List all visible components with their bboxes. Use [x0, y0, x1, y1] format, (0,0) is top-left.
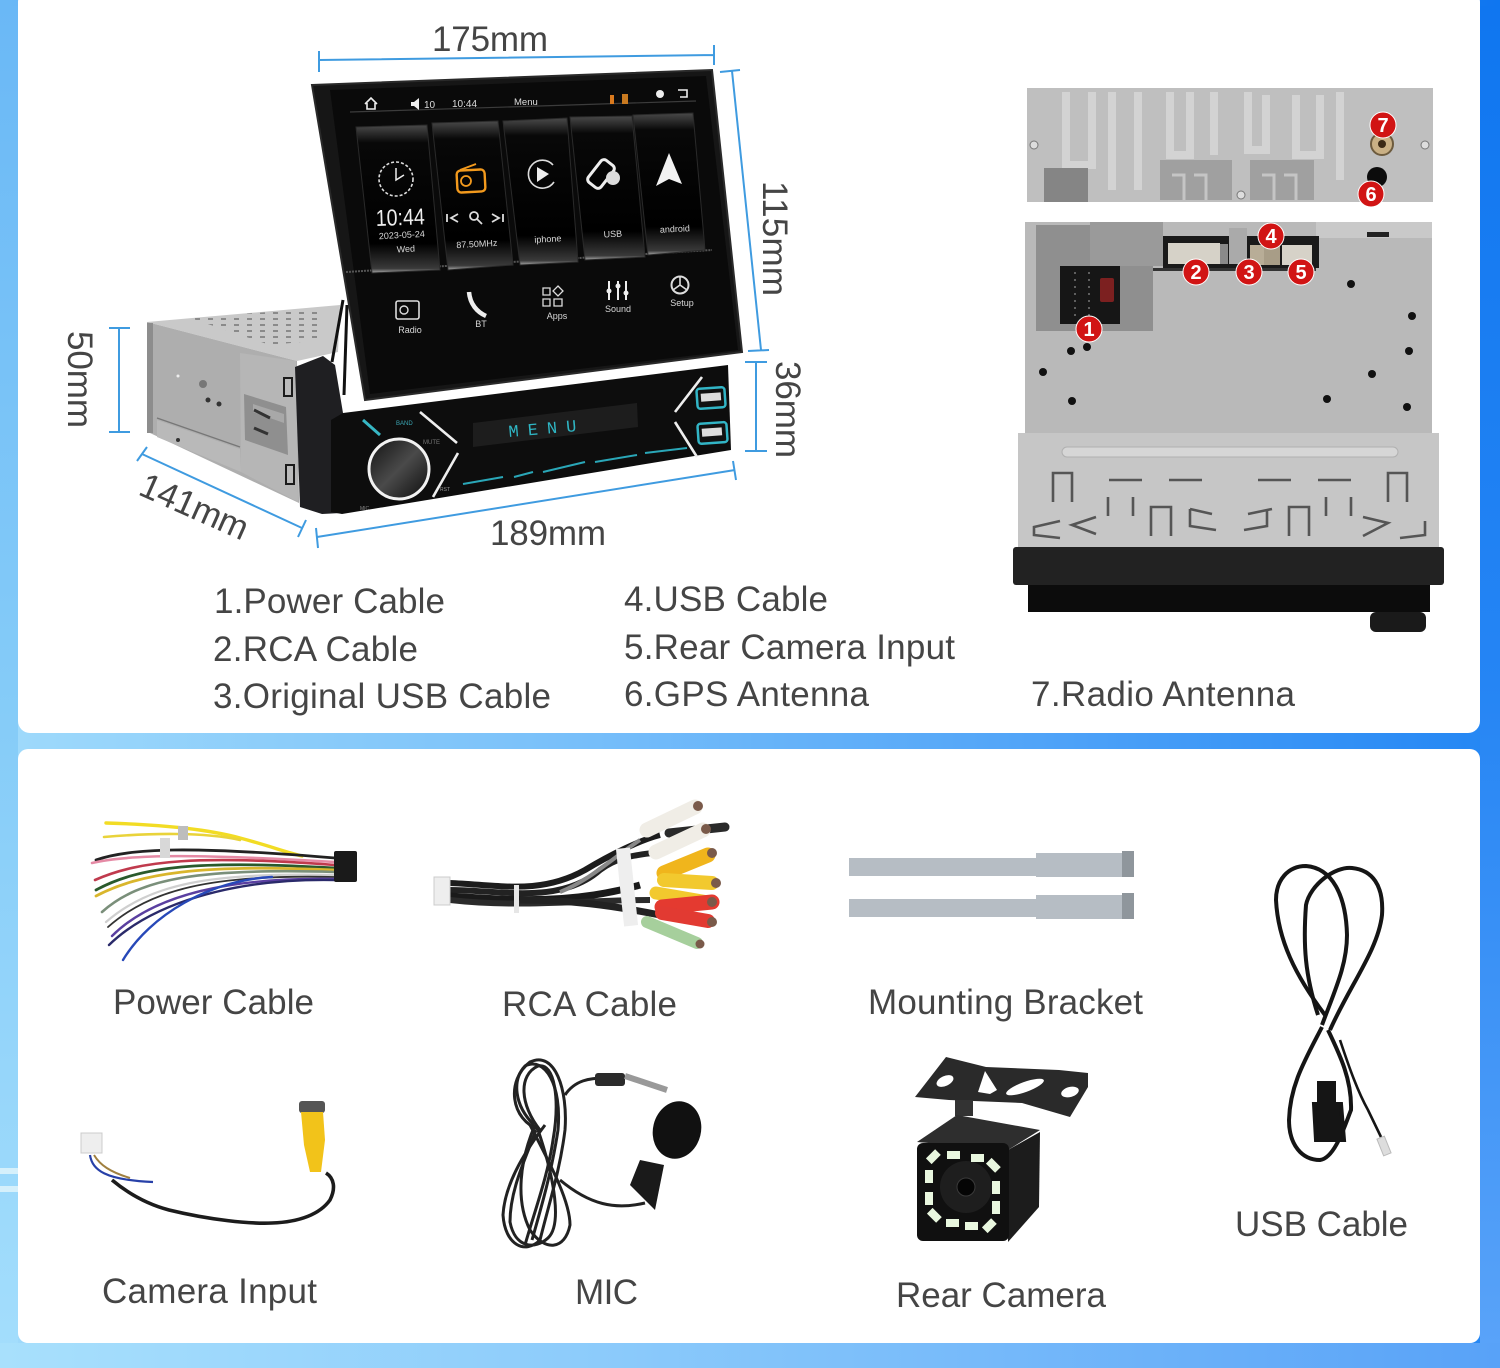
- faceplate of the radio: [295, 300, 731, 514]
- accessory captions: Rear Camera: [896, 1276, 1107, 1315]
- rear view: bottom bracket: [1018, 433, 1439, 547]
- bottom menu icons: Apps: [547, 311, 568, 321]
- numbered port markers: 4: [1265, 226, 1277, 248]
- port legend: 1.Power Cable: [214, 582, 445, 621]
- numbered port markers: 2: [1190, 262, 1202, 284]
- accessory captions: RCA Cable: [502, 985, 677, 1024]
- bottom menu icons: BT: [475, 319, 487, 329]
- mounting bracket illustration: [849, 851, 1134, 919]
- USB cable illustration: [1276, 866, 1391, 1160]
- dimension: 50mm: 50mm: [60, 331, 99, 428]
- clock card: 10:44: [375, 203, 425, 231]
- port legend: [213, 580, 1296, 716]
- port legend: 4.USB Cable: [624, 580, 828, 619]
- clock card: [375, 162, 425, 254]
- radio card: [447, 164, 503, 250]
- numbered port markers: 3: [1243, 262, 1255, 284]
- chassis of the radio: [147, 305, 340, 503]
- bottom menu icons: Setup: [670, 298, 694, 308]
- dimension: 189mm: [316, 461, 736, 553]
- clock card: Wed: [396, 244, 415, 254]
- faceplate of the radio: MUTE: [423, 440, 440, 446]
- port legend: 3.Original USB Cable: [213, 677, 551, 716]
- port legend: 6.GPS Antenna: [624, 675, 870, 714]
- faceplate of the radio: RST: [440, 487, 450, 493]
- panel: included accessories: [18, 749, 1480, 1343]
- USB card: [586, 158, 622, 239]
- dimension: 141mm: [134, 447, 306, 548]
- dimension: 141mm: 141mm: [134, 466, 255, 548]
- dimension: 189mm: 189mm: [490, 514, 606, 553]
- port legend: 5.Rear Camera Input: [624, 628, 955, 667]
- USB connectors: [1250, 245, 1268, 265]
- rear view: chassis: [1025, 222, 1432, 434]
- numbered port markers: [1076, 112, 1396, 342]
- accessory captions: [102, 983, 1408, 1315]
- dimension: 115mm: [720, 70, 794, 351]
- accessory captions: Power Cable: [113, 983, 314, 1022]
- dimension: 175mm: 175mm: [432, 20, 548, 59]
- USB card: USB: [603, 229, 622, 239]
- panel: product dimensions and ports: [18, 0, 1480, 733]
- faceplate of the radio: BAND: [396, 421, 413, 427]
- top status bar: 10:44: [452, 99, 477, 110]
- radio antenna socket: [1371, 133, 1393, 155]
- accessory captions: Mounting Bracket: [868, 983, 1143, 1022]
- dimension: 175mm: [319, 20, 714, 72]
- accessory captions: Camera Input: [102, 1272, 317, 1311]
- rear view: front bezel and knob: [1013, 547, 1444, 632]
- android card: android: [660, 223, 690, 235]
- RCA connector: [1168, 243, 1220, 264]
- rear camera illustration: [915, 1057, 1088, 1242]
- iphone card: [528, 160, 562, 245]
- bottom menu icons: Radio: [398, 325, 422, 335]
- dimension: 36mm: 36mm: [768, 361, 807, 458]
- bottom menu icons: Sound: [605, 304, 631, 314]
- GPS antenna socket: [1367, 167, 1387, 187]
- dimension: 36mm: [745, 361, 807, 458]
- accessory captions: MIC: [575, 1273, 638, 1312]
- USB ports: [696, 387, 728, 444]
- top status bar: [365, 90, 687, 111]
- numbered port markers: 6: [1365, 184, 1377, 206]
- numbered port markers: 1: [1083, 319, 1095, 341]
- preset buttons: [463, 448, 687, 484]
- volume knob: [369, 439, 429, 499]
- display with MENU text: [473, 403, 638, 447]
- rear view: heat sink plate: [1027, 88, 1433, 202]
- touch screen of the radio: [312, 70, 742, 400]
- radio card: 87.50MHz: [456, 238, 498, 250]
- dimension: 50mm: [60, 328, 130, 432]
- faceplate of the radio: MIC: [360, 506, 370, 512]
- RCA cable illustration: [434, 801, 725, 948]
- numbered port markers: 7: [1377, 115, 1389, 137]
- power connector: [1060, 266, 1120, 324]
- microphone illustration: [503, 1060, 707, 1247]
- top status bar: 10: [424, 100, 436, 111]
- iphone card: iphone: [534, 233, 562, 245]
- numbered port markers: 5: [1295, 262, 1307, 284]
- app cards: [356, 113, 705, 273]
- mounting holes: [1039, 280, 1416, 411]
- dimension: 115mm: 115mm: [755, 181, 794, 296]
- camera input cable illustration: [81, 1101, 333, 1223]
- clock card: 2023-05-24: [379, 229, 425, 241]
- port legend: 2.RCA Cable: [213, 630, 418, 669]
- top status bar: Menu: [514, 97, 538, 108]
- accessory captions: USB Cable: [1235, 1205, 1408, 1244]
- display with MENU text: MENU: [508, 418, 577, 443]
- bottom menu icons: [396, 276, 694, 335]
- camera LEDs: [925, 1149, 1001, 1233]
- power cable illustration: [92, 823, 357, 960]
- android card: [656, 153, 690, 235]
- port legend: 7.Radio Antenna: [1031, 675, 1296, 714]
